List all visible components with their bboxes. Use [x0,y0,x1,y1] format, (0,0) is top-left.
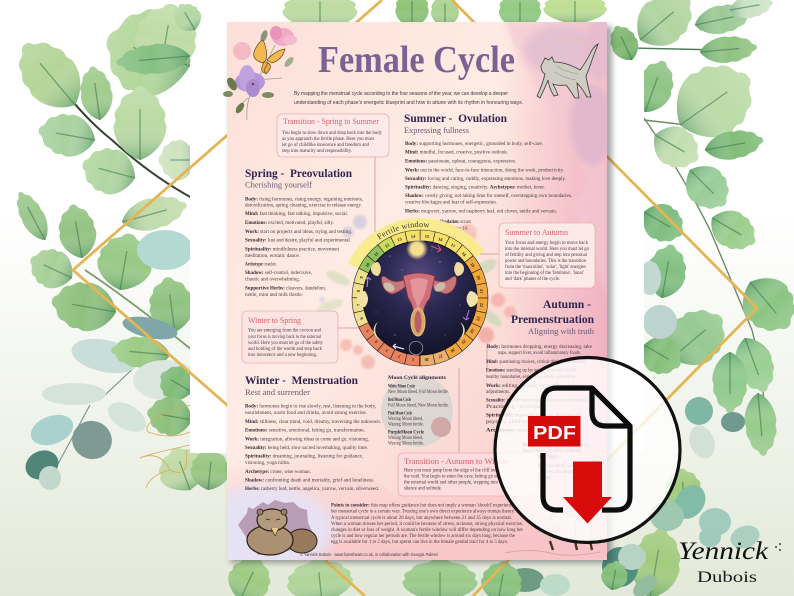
icon: document outline [543,388,630,510]
day numbers: 5 [364,328,370,333]
panel: summer ovulation: Shadow: overly giving, not taking time for oneself, overstepping own boundaries, [405,192,572,199]
panel: winter to spring [242,311,338,363]
day numbers: 24 [469,328,476,335]
day numbers: 8 [356,289,361,292]
panel: moon cycle alignments: Waning Moon fertile. [388,420,424,428]
day numbers: 20 [475,275,482,281]
poster [227,22,607,560]
panel: summer to autumn: from the 'masculine', 'solar', 'light' energies [505,263,586,270]
panel: spring preovulation: Emotions: excited, motivated, playful, silly. [245,219,334,226]
poster shadow [230,26,612,563]
panel: summer ovulation: Expressing fullness [404,125,470,135]
panel: summer ovulation: Sexuality: loving and caring, cuddly, expressing emotions, making love deeply. [405,176,566,182]
icon: download arrow [563,462,612,524]
panel: moon cycle alignments: Waning Moon bleed, [388,435,423,441]
intro text: By mapping the menstrual cycle according to the four seasons of the year, we can develop a deeper [294,91,508,97]
panel: winter menstruation: Emotions: sensitive, emotional, letting go, transformation. [245,426,365,434]
panel: spring preovulation: Work: start on projects and ideas, trying and testing. [245,229,352,235]
day numbers: 6 [358,316,364,320]
moon phases [357,238,478,355]
pink side flowers [459,224,516,343]
callout: ovulation day: around day 14. [440,226,468,232]
panel: summer ovulation: Emotions: passionate, upbeat, courageous, expressive. [405,158,516,164]
day numbers: 11 [373,251,379,257]
panel: winter to spring: your focus is moving back to the external [248,333,322,340]
connector lines [338,157,499,453]
cycle arrows [365,245,469,349]
day ring [352,230,488,366]
panel: autumn premenstruation: Body: hormones dropping, energy decreasing, take [487,344,593,350]
panel: winter to spring: into innocence and a new beginning. [248,352,317,358]
panel: summer ovulation [404,111,572,214]
panel: moon cycle alignments: Waxing Moon bleed, [388,416,423,422]
text: points to consider: changes in diet or loss of weight. A woman's fertile window will differ depending on how long her [331,526,523,533]
icon: PDF label: PDF [533,423,576,443]
panel: winter menstruation: Spirituality: dreaming, journaling, listening for guidance, [245,452,363,460]
panel: spring preovulation: Body: rising hormones, rising energy, regaining nutrients, [245,196,363,202]
panel: autumn premenstruation: Herbs: shatavari, nettle, vervain, [522,463,582,469]
panel: autumn premenstruation: wisteria, yarrow, dandelion, [522,469,576,475]
day numbers: 27 [437,353,443,360]
text: points to consider: A typical menstrual cycle is about 28 days, but anywhere between 21 and 35 days is normal. [331,515,512,521]
panel: summer ovulation: Mind: mindful, focused, creative, positive outlook. [405,148,508,156]
text: points to consider: Points to consider: this map offers guidance but does not imply a woman 'should' experience [331,502,515,508]
panel: autumn premenstruation: Mind: questioning choices, critical thinking, reflecting. [486,358,586,365]
title: Female Cycle [318,39,515,81]
panel: moon cycle alignments: Waxing Moon fertile. [388,440,424,446]
floral corner with butterfly [223,26,297,120]
panel: spring preovulation: Supportive Herbs: cleavers, dandelion, [245,286,326,292]
day numbers: 25 [460,339,467,346]
panel: transition spring to summer: as you approach the fertile phase. Here you must [282,135,375,142]
intro text: understanding of each phase's energetic blueprint and how to attune with its rhythm in honouring ways. [294,100,523,106]
logo: Yennick Dubois [678,538,781,586]
fertile window band: Fertile window [376,221,430,240]
logo: Yennick Dubois: Dubois [697,569,757,586]
panel: summer to autumn [499,223,595,288]
blueberry sprig behind spring text [315,215,375,369]
panel: spring preovulation: nettle, mint and milk thistle. [245,292,303,298]
panel: spring preovulation: chaotic and overwhelming. [245,276,300,282]
panel: spring preovulation [245,166,363,298]
panel: autumn premenstruation: judgmental, angry. [521,454,560,460]
panel: summer ovulation: creative blockages and fear of self-expression. [405,198,497,206]
panel: autumn premenstruation: adjustments. [486,389,510,395]
panel: transition autumn to winter: Here you must jump from the edge of the cliff into [404,466,498,474]
callout: ovulation day: Ovulation occurs [440,219,471,225]
panel: transition autumn to winter: the void. You begin to enter the cave, letting go of [404,472,498,480]
panel: moon cycle alignments [381,375,453,447]
panel: moon cycle alignments: Moon Cycle alignments [388,375,447,381]
day numbers: 7 [356,303,361,306]
panel: transition spring to summer: Transition - Spring to Summer [283,117,379,126]
panel: autumn premenstruation: burdock, chaste. [522,475,552,481]
panel: winter menstruation: nourishment, warm food and drinks, avoid strong exercise. [245,409,367,416]
lavender halo behind bear [227,483,338,560]
panel: transition spring to summer: You begin to slow down and drop back into the body [282,130,382,136]
logo: Yennick Dubois: Yennick [678,538,769,565]
white backing panel [190,63,644,453]
panel: autumn premenstruation: Practising receiving. [486,404,546,410]
text: points to consider: her menstrual cycle in a certain way. Trusting one's own direct experience always trumps theory. [331,508,515,514]
panel: autumn premenstruation: naps, support liver, avoid inflammatory foods. [498,349,581,356]
panel: summer to autumn: of fertility and giving and step into personal [505,251,588,258]
day numbers [356,234,484,362]
panel: spring preovulation: Cherishing yourself [245,180,312,190]
panel: autumn premenstruation: short fuse, overly critical, [522,447,582,454]
panel: autumn premenstruation: Shadow: irritable, moody, touchy, [522,442,590,448]
panel: summer to autumn: Your focus and energy begin to move back [505,239,588,246]
fertile window band [348,218,484,268]
panel: winter menstruation: visioning, yoga nidra. [245,460,290,466]
panel: winter menstruation [245,373,381,492]
icon: butterfly [254,40,285,74]
panel: moon cycle alignments: Red Moon Cycle [388,397,411,403]
day numbers: 22 [479,302,484,307]
callout: ovulation day [440,219,471,232]
footer credit: © Yannick Dubois · www.forestheart.co.uk, in collaboration with Georgia Palmer [300,551,438,557]
panel: summer ovulation: Spirituality: dancing, singing, creativity. Archetypes: mother, lover. [405,184,545,190]
illustration: wolf [505,501,600,555]
panel: transition autumn to winter: silence and solitude. [404,486,442,492]
panel: transition autumn to winter: the external world and other people, stepping into [404,480,498,486]
day numbers: 4 [373,339,379,344]
panel: spring preovulation: Archetype: maiden. [245,262,277,268]
panel: transition spring to summer: step into maturity and responsibility. [282,148,352,154]
panel: summer ovulation: Work: out in the world, face-to-face interaction, doing the work, productivity. [405,166,564,174]
foliage: top and bottom strips [169,0,630,596]
day numbers: 3 [384,347,389,353]
uterus illustration [382,273,456,336]
chart: cycle wheel [348,218,488,366]
day numbers: 16 [438,236,444,243]
panel: winter to spring: You are emerging from the cocoon and [248,326,321,334]
day numbers: 21 [479,289,484,294]
day numbers: 19 [469,262,476,269]
panel: transition spring to summer: let go of childlike innocence and freedom and [282,141,369,148]
panel: spring preovulation: Mind: fast thinking, fast talking, impulsive, social. [245,210,348,217]
panel: spring preovulation: meditation, ecstatic dance. [245,253,300,259]
panel: winter menstruation: Body: hormones begin to rise slowly, rest, listening to the body, [245,404,376,410]
panel: summer ovulation: Herbs: mugwort, yarrow, red raspberry leaf, red clover, nettle and vervain. [405,208,557,214]
panel: autumn premenstruation: Aligning with truth [528,326,595,336]
day numbers: 2 [398,354,401,359]
panel: autumn premenstruation: Archetype: priestess, wise woman. [486,428,574,434]
day numbers: 1 [412,357,414,362]
day numbers: 18 [461,251,468,258]
panel: moon cycle alignments: White Moon Cycle [388,384,415,390]
illustration: bear in cave [238,500,317,555]
panel: spring preovulation: Shadow: self-control, indecisive, [245,269,312,276]
panel: winter menstruation: Archetype: crone, wise woman. [245,469,311,475]
panel: summer to autumn: Summer to Autumn [505,228,568,237]
panel: spring preovulation: Spring - Preovulation [245,166,352,180]
panel: winter menstruation: Shadow: confronting death and mortality, grief and loneliness. [245,476,374,484]
day numbers: 14 [411,234,416,239]
day numbers: 15 [424,234,430,239]
panel: spring preovulation: Sexuality: lust and desire, playful and experimental. [245,236,351,244]
panel: moon cycle alignments: Pink Moon Cycle [388,410,412,416]
text: points to consider [331,502,523,545]
panel: winter menstruation: Sexuality: being held, slow sacred lovemaking, quality time. [245,445,368,451]
panel: summer to autumn: power and boundaries. This is the transition [505,258,586,264]
panel: winter menstruation: Work: integration, allowing ideas to come and go, visioning. [245,436,369,442]
badge: PDF download [495,358,680,542]
day numbers: 28 [424,357,429,362]
panel: spring preovulation: Spirituality: mindfulness practice, movement [245,246,340,252]
panel: moon cycle alignments: Full Moon bleed, New Moon fertile. [388,402,449,408]
panel: autumn premenstruation: Emotions: standing up for oneself and one's beliefs, [486,366,578,374]
text: points to consider: cycle is and how regular her periods are. The fertile window is around six days long, because the [331,532,516,539]
panel: winter menstruation: Herbs: rasberry leaf, nettle, angelica, yarrow, vervain, silverweed. [245,485,379,492]
day numbers: 9 [359,275,364,279]
panel: moon cycle alignments: PurpleMoon Cycle [388,430,425,436]
panel: winter menstruation: Rest and surrender [245,387,310,397]
panel: autumn premenstruation: Work: editing, revising, completing, making [486,383,582,389]
panel: summer to autumn: into the internal world. Here you must let go [505,246,589,252]
text: points to consider: When a woman misses her period, it could be because of stress, sickness, strong physical exercise, [331,520,523,527]
text: points to consider: egg is available for 1 to 2 days, but sperm can live in the female genital tract for 4 to 5 days. [331,538,508,545]
panel: summer ovulation: Body: supporting hormones, energetic, grounded in body, self-care. [405,140,543,147]
panel: summer to autumn: into the beginning of the 'feminine', 'lunar' [505,269,584,276]
foliage: right branch [506,0,794,596]
panel: autumn premenstruation: Spirituality: exploring mystery, intuition and [486,412,582,418]
panel: autumn premenstruation: Sexuality: talking about relationship needs and desires. [486,398,588,404]
panel: autumn premenstruation: psychic abilities, dreamwork. [486,419,566,425]
panel: autumn premenstruation: Premenstruation [511,312,594,326]
day numbers: 17 [450,242,457,249]
panel: summer to autumn: and 'dark' phases of the cycle. [505,275,560,282]
intro text [294,91,523,106]
panel: transition autumn to winter [398,453,538,496]
panel: winter to spring: and holding of the womb and step back [248,345,322,352]
day numbers: 13 [397,236,403,243]
foliage: left branch [4,0,232,498]
panel: autumn premenstruation: healthy boundaries, expressing needs, alone time. [486,374,576,380]
icon: PDF label [528,416,580,446]
panel: moon cycle alignments: New Moon bleed, Full Moon fertile. [388,388,449,395]
panel: autumn premenstruation: Autumn - [543,297,591,311]
panel: summer ovulation: Summer - Ovulation [404,111,507,125]
panel: winter menstruation: Mind: stillness, clear mind, void, dreamy, traversing the unknown. [245,419,381,425]
marble swirl top right [506,22,607,286]
day numbers: 12 [384,242,390,249]
panel: spring preovulation: detoxification, spring cleaning, exercise to release energy. [245,202,362,208]
panel: winter to spring: Winter to Spring [248,316,301,325]
panel: winter to spring: world. Here you must let go of the safety [248,339,323,346]
panel: autumn premenstruation [486,297,595,481]
gold swirl [140,405,190,488]
icon: cat [537,44,598,98]
day numbers: 10 [364,261,371,268]
panel: winter menstruation: Winter - Menstruation [245,373,358,387]
day numbers: 23 [475,316,482,322]
panel: transition spring to summer [277,114,389,157]
panel: transition autumn to winter: Transition - Autumn to Winter [404,457,508,466]
night sky disc [363,241,477,355]
day numbers: 26 [449,347,456,354]
